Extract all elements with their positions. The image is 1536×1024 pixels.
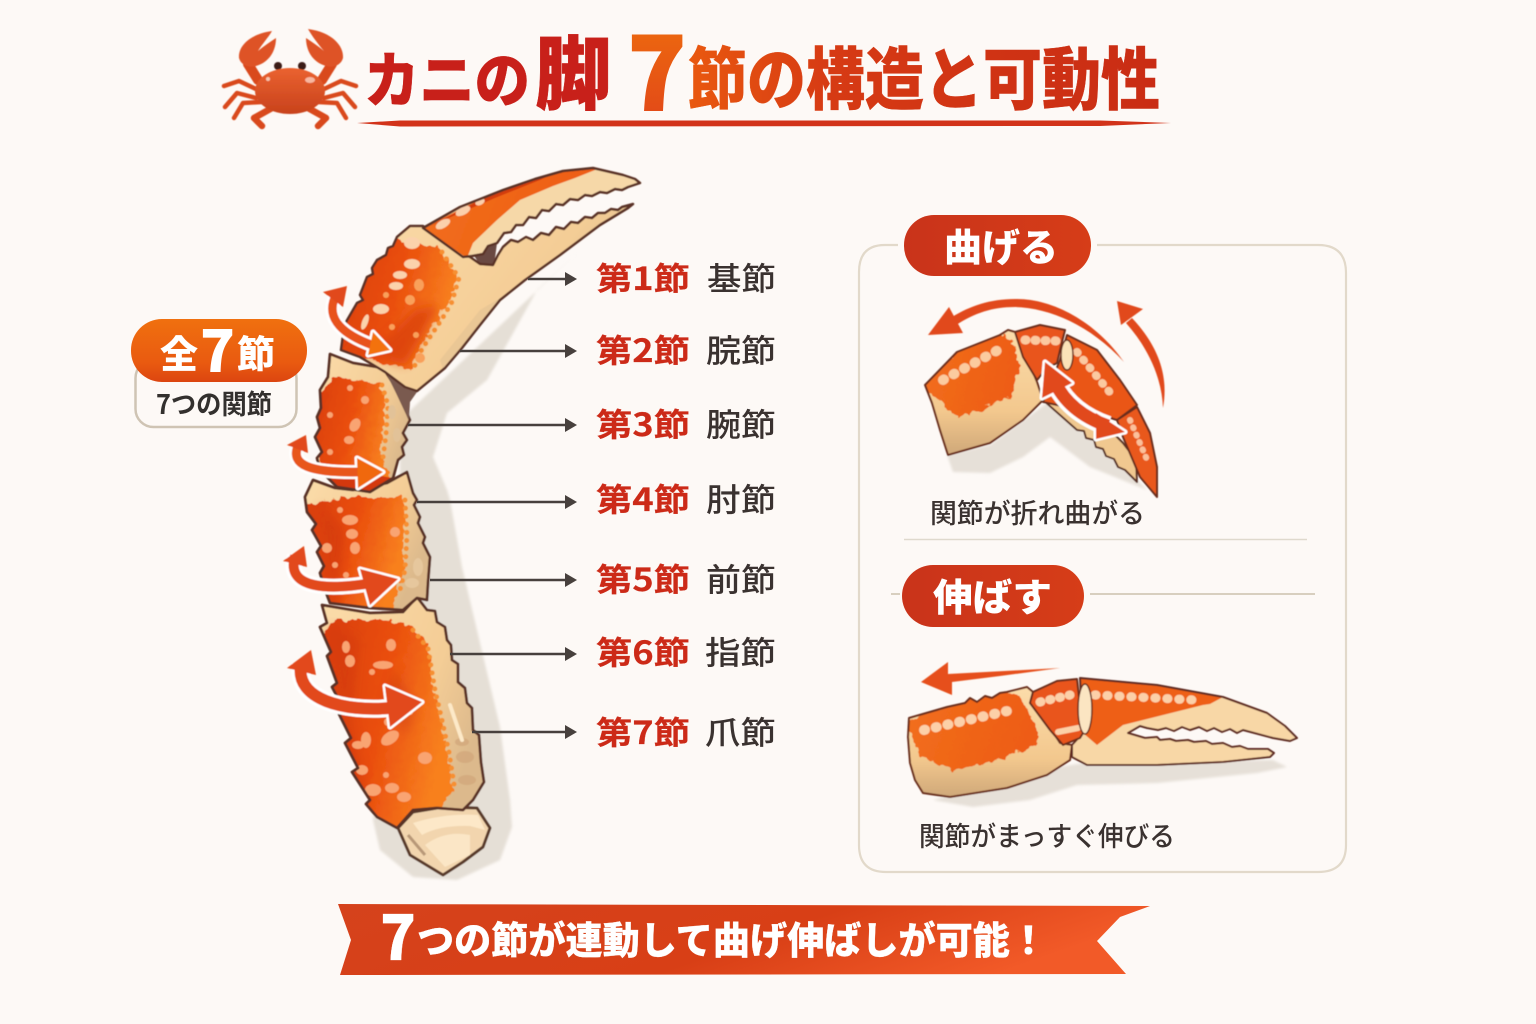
label: 第7節 爪節: 爪節 (705, 708, 776, 754)
segment: claw palm with fixed finger (340, 204, 633, 391)
badge heading: 7 (200, 305, 235, 389)
motion arrow 1 (323, 286, 390, 355)
illustration: bent claw (920, 299, 1165, 497)
arrow: 第1節 (528, 272, 577, 286)
arrow: 第7節 (472, 725, 577, 739)
heading pill: 伸ばす: 伸ばす (933, 567, 1052, 622)
title: 脚 (535, 11, 612, 127)
banner (338, 888, 1150, 978)
segment: upper leg (312, 354, 410, 495)
banner text: つの節が連動して曲げ伸ばしが可能！ (417, 910, 1047, 965)
arrow: upward curve (1117, 301, 1165, 408)
label: 第6節 指節: 第6節 (596, 628, 690, 674)
motion arrow 4 (287, 650, 422, 727)
arrow: double-headed joint arrow (1042, 362, 1125, 439)
banner ribbon (338, 904, 1150, 975)
motion arrow 2 (287, 435, 383, 488)
leg shadow (373, 253, 577, 880)
bent claw fixed finger (1043, 385, 1137, 482)
caption: extending: 関節がまっすぐ伸びる (919, 815, 1175, 854)
bent claw base segment (920, 330, 1043, 455)
heading pill: 伸ばす (902, 565, 1084, 627)
label: 第2節 脘節: 脘節 (706, 326, 776, 372)
arrow: 第6節 (450, 647, 577, 661)
label: 第1節 基節: 基節 (707, 254, 776, 300)
title underline (357, 120, 1171, 126)
motion arrow 3 (283, 546, 398, 605)
label: 第6節 指節 (596, 628, 776, 674)
badge: 全7節 (131, 305, 307, 427)
label: 第5節 前節: 前節 (706, 555, 776, 601)
label: 第2節 脘節: 第2節 (596, 326, 690, 372)
badge heading (160, 305, 275, 389)
label: 第3節 腕節: 第3節 (596, 400, 690, 446)
straight claw knuckle (1030, 679, 1092, 745)
arrow: 第4節 (417, 495, 577, 509)
bent claw forearm (1043, 335, 1137, 420)
label: 第1節 基節 (596, 254, 776, 300)
joint membrane (385, 371, 417, 420)
label: 第4節 肘節: 肘節 (706, 475, 776, 521)
label: 第3節 腕節 (596, 400, 776, 446)
segment: movable claw tip (423, 168, 640, 258)
arrow: sweeping arc (928, 299, 1124, 362)
label: 第4節 肘節: 第4節 (596, 475, 690, 521)
label: 第5節 前節: 第5節 (596, 555, 690, 601)
arrow: extension direction (921, 662, 1060, 695)
caption: bending: 関節が折れ曲がる (930, 492, 1145, 531)
bent claw shadow (947, 403, 1147, 490)
panel frame (859, 245, 1346, 872)
arrow: 第5節 (430, 573, 577, 587)
arrow: 第3節 (408, 418, 577, 432)
badge pill (131, 319, 307, 382)
label: 第5節 前節 (596, 555, 776, 601)
bent claw movable tip (1117, 407, 1157, 497)
label: 第6節 指節: 指節 (705, 628, 776, 674)
title: カニの (364, 33, 530, 120)
badge caption: 7つの関節 (156, 383, 272, 422)
badge heading: 全 (160, 324, 198, 379)
straight claw shadow (933, 760, 1287, 807)
bent claw knuckle (1015, 325, 1065, 380)
heading pill: 曲げる: 曲げる (944, 217, 1058, 272)
label: 第2節 脘節 (596, 326, 776, 372)
banner text (380, 888, 1047, 978)
icon: crab (224, 29, 356, 126)
segment: base stump (398, 807, 490, 875)
straight claw base segment (905, 687, 1072, 797)
segment: lower leg (318, 597, 484, 830)
straight claw main pincer (1072, 678, 1297, 765)
label: 第4節 肘節 (596, 475, 776, 521)
banner text: 7 (380, 888, 416, 978)
label: 第3節 腕節: 腕節 (706, 400, 776, 446)
panel: bending and extending (859, 215, 1346, 872)
segment: middle leg (305, 472, 430, 610)
title (364, 0, 1160, 139)
label: 第1節 基節: 第1節 (596, 254, 690, 300)
title: 節の構造と可動性 (688, 25, 1160, 124)
badge heading: 節 (237, 324, 275, 379)
badge lower box (136, 360, 296, 427)
label: 第7節 爪節: 第7節 (596, 708, 690, 754)
label: 第7節 爪節 (596, 708, 776, 754)
illustration: crab leg with 7 segments (283, 168, 640, 880)
arrow: 第2節 (460, 344, 577, 358)
heading pill: 曲げる (904, 215, 1091, 276)
illustration: straight claw (905, 662, 1297, 807)
